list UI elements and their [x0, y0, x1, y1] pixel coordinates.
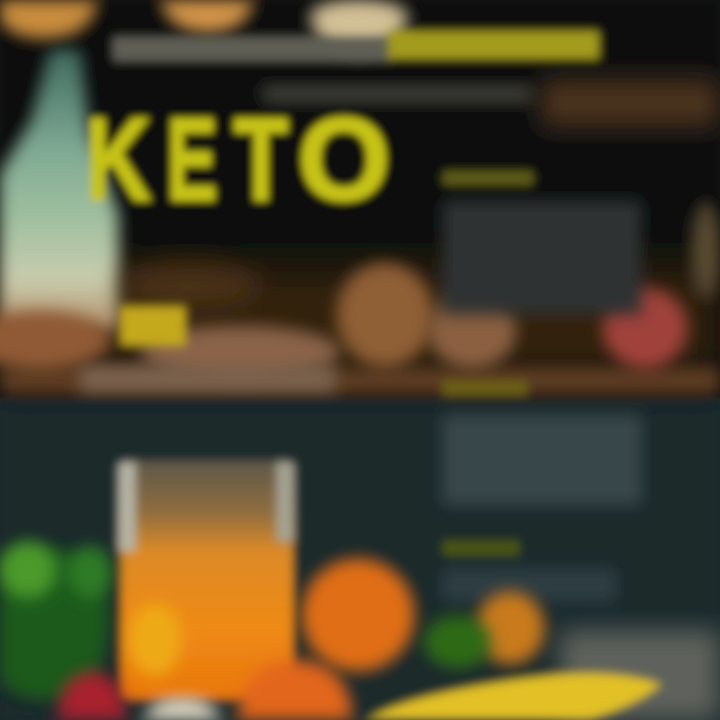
section one heading — [442, 170, 534, 186]
wooden shelf with food — [0, 202, 720, 394]
section two text block — [442, 415, 642, 505]
section one text block — [442, 200, 642, 315]
title bar — [112, 30, 600, 62]
section two heading — [442, 380, 528, 396]
headline: KETO: K — [85, 94, 151, 226]
glass of orange juice — [118, 460, 294, 700]
headline: KETO: E — [167, 94, 217, 226]
top produce blobs — [0, 0, 408, 54]
headline: KETO: T — [234, 94, 288, 226]
subtitle — [262, 84, 532, 104]
section three heading — [442, 540, 520, 556]
fruit and vegetables — [0, 542, 662, 720]
counter at bottom right — [560, 630, 720, 720]
headline: KETO — [85, 94, 390, 226]
section three text block — [442, 568, 617, 602]
headline: KETO: O — [298, 94, 390, 226]
bottle — [0, 50, 118, 330]
